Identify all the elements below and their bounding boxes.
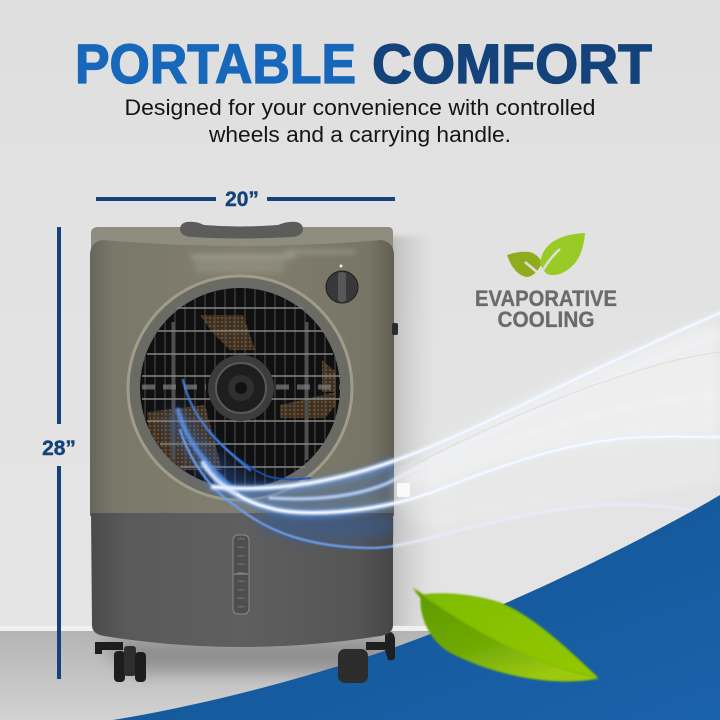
width dimension: 20 inches: 20” [225, 188, 259, 211]
subtitle [124, 95, 596, 147]
blue swoosh [113, 495, 720, 720]
shell reflections [190, 250, 355, 273]
white streak C [203, 437, 720, 513]
fan housing [126, 274, 354, 502]
white streak A [213, 313, 720, 488]
motor [208, 355, 274, 421]
wall shadow beside cooler [388, 236, 434, 628]
side knob [392, 323, 398, 335]
floor shadow [100, 640, 395, 672]
icon: green leaf [413, 588, 598, 681]
height dimension: 28 inches [42, 227, 76, 679]
control dial [326, 264, 358, 303]
height dimension: 28 inches: 28” [42, 437, 76, 460]
baseboard [0, 626, 720, 631]
cooling pad [147, 315, 336, 470]
water level gauge [233, 535, 249, 614]
white haze between streaks [394, 320, 720, 503]
evaporative cooling badge: EVAPORATIVE [475, 286, 617, 311]
evaporative cooling badge [475, 233, 617, 332]
grille verticals [145, 280, 335, 500]
drain plug [397, 483, 410, 497]
title: PORTABLE [75, 32, 356, 95]
light streak D [394, 504, 690, 546]
subtitle: wheels and a carrying handle. [208, 122, 511, 147]
olive upper body [90, 240, 394, 516]
right caster [338, 632, 395, 683]
subtitle: Designed for your convenience with controlled [124, 95, 596, 120]
white streak B [270, 335, 720, 499]
faint streak [400, 352, 720, 472]
floor [0, 631, 720, 720]
icon: leaves [507, 233, 585, 277]
evaporative cooling badge: COOLING [498, 307, 594, 332]
blue tint on cooler [178, 380, 410, 548]
back plate [91, 227, 393, 260]
water tank [91, 513, 393, 647]
air flow streaks [178, 313, 720, 548]
title [75, 32, 652, 95]
carrying handle [180, 222, 303, 238]
left caster [95, 642, 146, 682]
grille horizontals [142, 308, 340, 467]
width dimension: 20 inches [96, 188, 395, 211]
evaporative cooler [90, 222, 410, 683]
title: COMFORT [372, 32, 652, 95]
